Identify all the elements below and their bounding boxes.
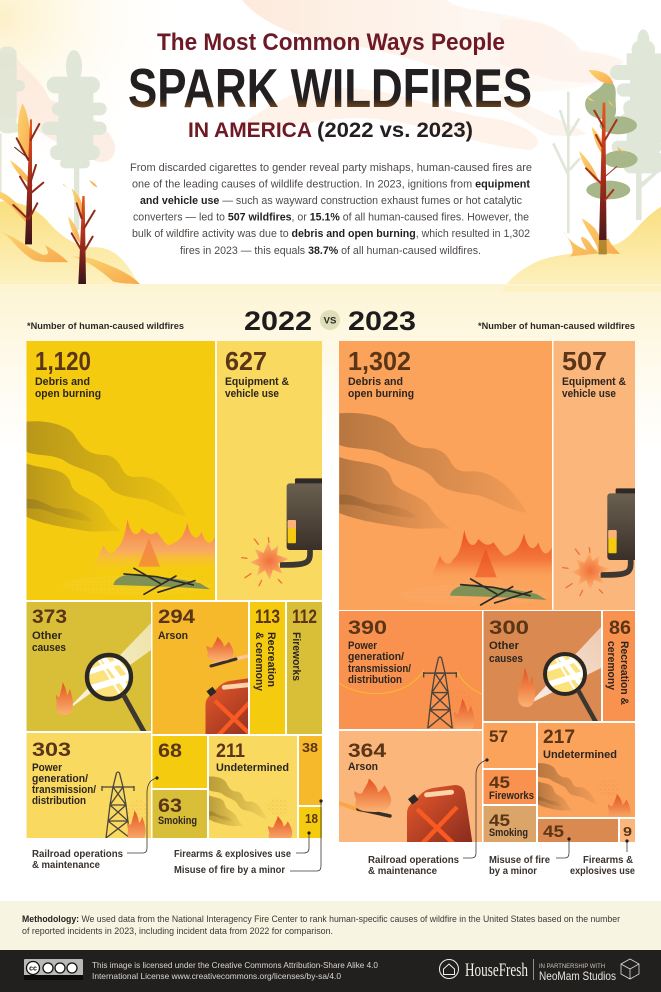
panel: recreation and ceremony 2022: & ceremony bbox=[253, 632, 265, 692]
panel: undetermined 2023: 217 bbox=[543, 727, 575, 748]
panel: debris and open burning 2023: Debris and bbox=[348, 376, 403, 388]
panel: fireworks 2023: Fireworks bbox=[489, 790, 534, 802]
panel: fireworks 2023 bbox=[484, 770, 536, 804]
heading: 2022 vs 2023: VS bbox=[324, 316, 336, 326]
panel: recreation and ceremony 2023 bbox=[603, 611, 635, 721]
callout: misuse of fire 2023: Misuse of fire bbox=[489, 855, 550, 866]
intro paragraph: fires in 2023 — this equals 38.7% of all human-caused wildfires. bbox=[180, 245, 481, 257]
panel: other causes 2022: causes bbox=[32, 642, 66, 654]
panel: power generation 2023: 390 bbox=[348, 618, 387, 639]
panel: arson 2022: Arson bbox=[158, 630, 188, 642]
panel: recreation and ceremony 2022: Recreation bbox=[265, 632, 277, 687]
heading: 2022 vs 2023 bbox=[244, 306, 416, 336]
panel: fireworks 2022: Fireworks bbox=[290, 632, 302, 681]
base flames right bbox=[563, 70, 626, 257]
panel: power generation 2023: distribution bbox=[348, 674, 402, 686]
panel: power generation 2022 bbox=[26, 733, 151, 842]
panel: undetermined 2022: 211 bbox=[216, 741, 245, 762]
callout: misuse of fire 2023 bbox=[489, 837, 571, 877]
divider and partner logo: NeoMam Studios bbox=[533, 959, 639, 983]
panel: railroad 2023 bbox=[484, 723, 536, 768]
methodology: of reported incidents in 2023, including incident data from 2022 for comparison. bbox=[22, 926, 333, 937]
panel: other causes 2023: causes bbox=[489, 653, 523, 665]
title line three: IN AMERICA bbox=[188, 118, 312, 142]
panel: recreation and ceremony 2022 bbox=[250, 602, 285, 734]
callout: railroad operations 2022: & maintenance bbox=[32, 860, 100, 871]
callout: firearms and explosives 2023: Firearms & bbox=[583, 855, 633, 866]
title bbox=[128, 29, 532, 142]
callout: railroad operations 2023: Railroad operations bbox=[368, 855, 459, 866]
panel: equipment and vehicle use 2022: vehicle use bbox=[225, 388, 279, 400]
bottom of header band bbox=[0, 284, 661, 286]
illustration: left forest with burning trees bbox=[0, 47, 140, 287]
panel: undetermined 2022: Undetermined bbox=[216, 762, 289, 774]
methodology bbox=[0, 901, 661, 950]
panel: firearms 2022 bbox=[299, 807, 322, 838]
callout: firearms and explosives 2023: explosives use bbox=[570, 866, 635, 877]
methodology: Methodology: We used data from the National Interagency Fire Center to rank human-specific causes of wildfire in the United States based on the number bbox=[22, 914, 620, 925]
panel: equipment and vehicle use 2023 bbox=[554, 341, 635, 610]
panel: debris and open burning 2023: open burning bbox=[348, 388, 414, 400]
panel: power generation 2023: generation/ bbox=[348, 651, 404, 663]
panel: equipment and vehicle use 2022: 627 bbox=[225, 346, 267, 376]
panel: smoking 2022: Smoking bbox=[158, 815, 197, 827]
panel: arson 2022 bbox=[152, 602, 248, 734]
panel: arson 2023: 364 bbox=[348, 741, 387, 762]
panel: fireworks 2022: 112 bbox=[292, 607, 317, 628]
callout: misuse of fire 2022: Misuse of fire by a minor bbox=[174, 865, 285, 876]
callout: railroad operations 2023: & maintenance bbox=[368, 866, 437, 877]
callout: misuse of fire 2022 bbox=[174, 799, 323, 876]
heading: 2022 vs 2023: 2022 bbox=[244, 306, 312, 336]
panel: recreation and ceremony 2023: Recreation & bbox=[618, 641, 630, 705]
panel: smoking 2023: Smoking bbox=[489, 827, 528, 839]
panel: other causes 2022: 373 bbox=[32, 607, 67, 628]
panel: debris and open burning 2022: Debris and bbox=[35, 376, 90, 388]
callout: railroad operations 2022: Railroad operations bbox=[32, 849, 123, 860]
panel: equipment and vehicle use 2022 bbox=[217, 341, 327, 600]
panel: arson 2023: Arson bbox=[348, 761, 378, 773]
panel: power generation 2023: Power bbox=[348, 640, 378, 652]
panel: undetermined 2022 bbox=[209, 736, 297, 842]
footer bbox=[0, 950, 661, 992]
pale tree at the left edge bbox=[0, 47, 25, 197]
callout: firearms and explosives 2022 bbox=[174, 831, 311, 860]
license text bbox=[92, 960, 378, 981]
panel: power generation 2022: transmission/ bbox=[32, 784, 96, 796]
panel: firearms 2023 bbox=[620, 819, 635, 842]
panel: undetermined 2023 bbox=[537, 723, 635, 821]
peach smoke right bbox=[500, 19, 623, 136]
icon: creative commons badge bbox=[24, 959, 83, 980]
panel: fireworks 2022 bbox=[287, 602, 322, 734]
title line three bbox=[188, 118, 473, 142]
license text: International License www.creativecommons.org/licenses/by-sa/4.0 bbox=[92, 971, 341, 981]
divider and partner logo: NeoMam Studios: NeoMam Studios bbox=[539, 969, 616, 983]
heading: 2022 vs 2023: 2023 bbox=[348, 306, 416, 336]
intro paragraph: converters — led to 507 wildfires, or 15.1% of all human-caused fires. However, the bbox=[133, 212, 529, 224]
panel: misuse by a minor 2022 bbox=[299, 736, 322, 805]
title line one: The Most Common Ways People bbox=[157, 29, 505, 56]
panel: other causes 2023: 300 bbox=[489, 618, 529, 639]
logo: HouseFresh: HouseFresh bbox=[465, 960, 528, 981]
note left: *Number of human-caused wildfires bbox=[27, 321, 184, 332]
pale tree right bbox=[610, 29, 661, 220]
panel: power generation 2023 bbox=[339, 611, 482, 733]
panel: railroad 2022 bbox=[152, 736, 207, 788]
panel: arson 2022: 294 bbox=[158, 607, 196, 628]
panel: equipment and vehicle use 2023: Equipment & bbox=[562, 376, 626, 388]
panel: smoking 2022 bbox=[152, 790, 207, 838]
panel: recreation and ceremony 2022: 113 bbox=[255, 607, 280, 628]
panel: equipment and vehicle use 2023: vehicle use bbox=[562, 388, 616, 400]
license text: This image is licensed under the Creative Commons Attribution-Share Alike 4.0 bbox=[92, 960, 378, 970]
panel: power generation 2022: distribution bbox=[32, 795, 86, 807]
thin dead pale tree bbox=[553, 92, 580, 233]
panel: misuse by a minor 2022: 38 bbox=[302, 740, 318, 755]
panel: railroad 2022: 68 bbox=[158, 741, 182, 762]
intro paragraph: and vehicle use — such as wayward construction exhaust fumes or hot catalytic bbox=[140, 195, 522, 207]
panel: smoking 2023: 45 bbox=[489, 811, 510, 830]
panel: misuse by a minor 2023: 45 bbox=[543, 822, 564, 841]
panel: firearms 2023: 9 bbox=[623, 824, 632, 839]
intro paragraph: one of the leading causes of wildlife destruction. In 2023, ignitions from equipment bbox=[132, 178, 530, 190]
panel: equipment and vehicle use 2022: Equipment & bbox=[225, 376, 289, 388]
panel: smoking 2022: 63 bbox=[158, 796, 182, 817]
callout: firearms and explosives 2022: Firearms & explosives use bbox=[174, 849, 291, 860]
panel: firearms 2022: 18 bbox=[305, 811, 318, 826]
panel: equipment and vehicle use 2023: 507 bbox=[562, 346, 607, 376]
note right: *Number of human-caused wildfires bbox=[478, 321, 635, 332]
panel: debris and open burning 2022 bbox=[26, 341, 215, 600]
panel: debris and open burning 2022: 1,120 bbox=[35, 346, 91, 376]
peach smoke left bbox=[0, 53, 115, 162]
panel: misuse by a minor 2023 bbox=[538, 819, 618, 842]
panel: other causes 2022 bbox=[26, 602, 151, 734]
panel: power generation 2023: transmission/ bbox=[348, 663, 411, 675]
intro paragraph bbox=[130, 162, 532, 257]
yellow hill left bbox=[0, 201, 140, 287]
panel: recreation and ceremony 2023: ceremony bbox=[605, 641, 617, 691]
panel: power generation 2022: Power bbox=[32, 762, 63, 774]
intro paragraph: From discarded cigarettes to gender reveal party mishaps, human-caused fires are bbox=[130, 162, 532, 174]
divider and partner logo: NeoMam Studios: IN PARTNERSHIP WITH bbox=[539, 964, 605, 970]
panel: other causes 2022: Other bbox=[32, 630, 63, 642]
panel: debris and open burning 2023: 1,302 bbox=[348, 346, 411, 376]
panel: recreation and ceremony 2023: 86 bbox=[609, 618, 631, 639]
panel: power generation 2022: generation/ bbox=[32, 773, 88, 785]
panel: other causes 2023: Other bbox=[489, 640, 520, 652]
panel: railroad 2023: 57 bbox=[489, 727, 508, 746]
burnt tree one bbox=[13, 119, 43, 244]
callout: railroad operations 2022 bbox=[32, 776, 159, 871]
panel: undetermined 2023: Undetermined bbox=[543, 749, 617, 761]
callout: railroad operations 2023 bbox=[368, 758, 489, 877]
callout: firearms and explosives 2023 bbox=[570, 839, 635, 877]
icon: creative commons badge: cc bbox=[29, 966, 37, 972]
callouts: 2023 bbox=[368, 758, 635, 877]
logo: HouseFresh bbox=[440, 960, 528, 981]
callout: misuse of fire 2023: by a minor bbox=[489, 866, 537, 877]
callouts: 2022 bbox=[32, 776, 323, 876]
intro paragraph: bulk of wildfire activity was due to debris and open burning, which resulted in 1,302 bbox=[132, 228, 530, 240]
panel: arson 2023 bbox=[339, 731, 482, 847]
pale tree left bbox=[42, 50, 107, 230]
title main: SPARK WILDFIRES bbox=[128, 58, 532, 119]
burnt tree two bbox=[72, 196, 95, 284]
burnt tree right bbox=[586, 103, 617, 254]
panel: power generation 2022: 303 bbox=[32, 740, 71, 761]
panel: other causes 2023 bbox=[484, 611, 601, 726]
panel: debris and open burning 2023 bbox=[339, 341, 552, 610]
panel: fireworks 2023: 45 bbox=[489, 773, 510, 792]
panel: smoking 2023 bbox=[484, 806, 536, 842]
panel: debris and open burning 2022: open burning bbox=[35, 388, 101, 400]
treemap: 2023 bbox=[339, 341, 647, 847]
yellow hill right bbox=[502, 207, 661, 292]
hill flames left bbox=[0, 103, 140, 284]
title line three: (2022 vs. 2023) bbox=[317, 118, 473, 142]
illustration: right forest with burning tree bbox=[500, 19, 661, 292]
treemap: 2022 bbox=[26, 341, 327, 842]
tree foliage bbox=[585, 82, 638, 199]
